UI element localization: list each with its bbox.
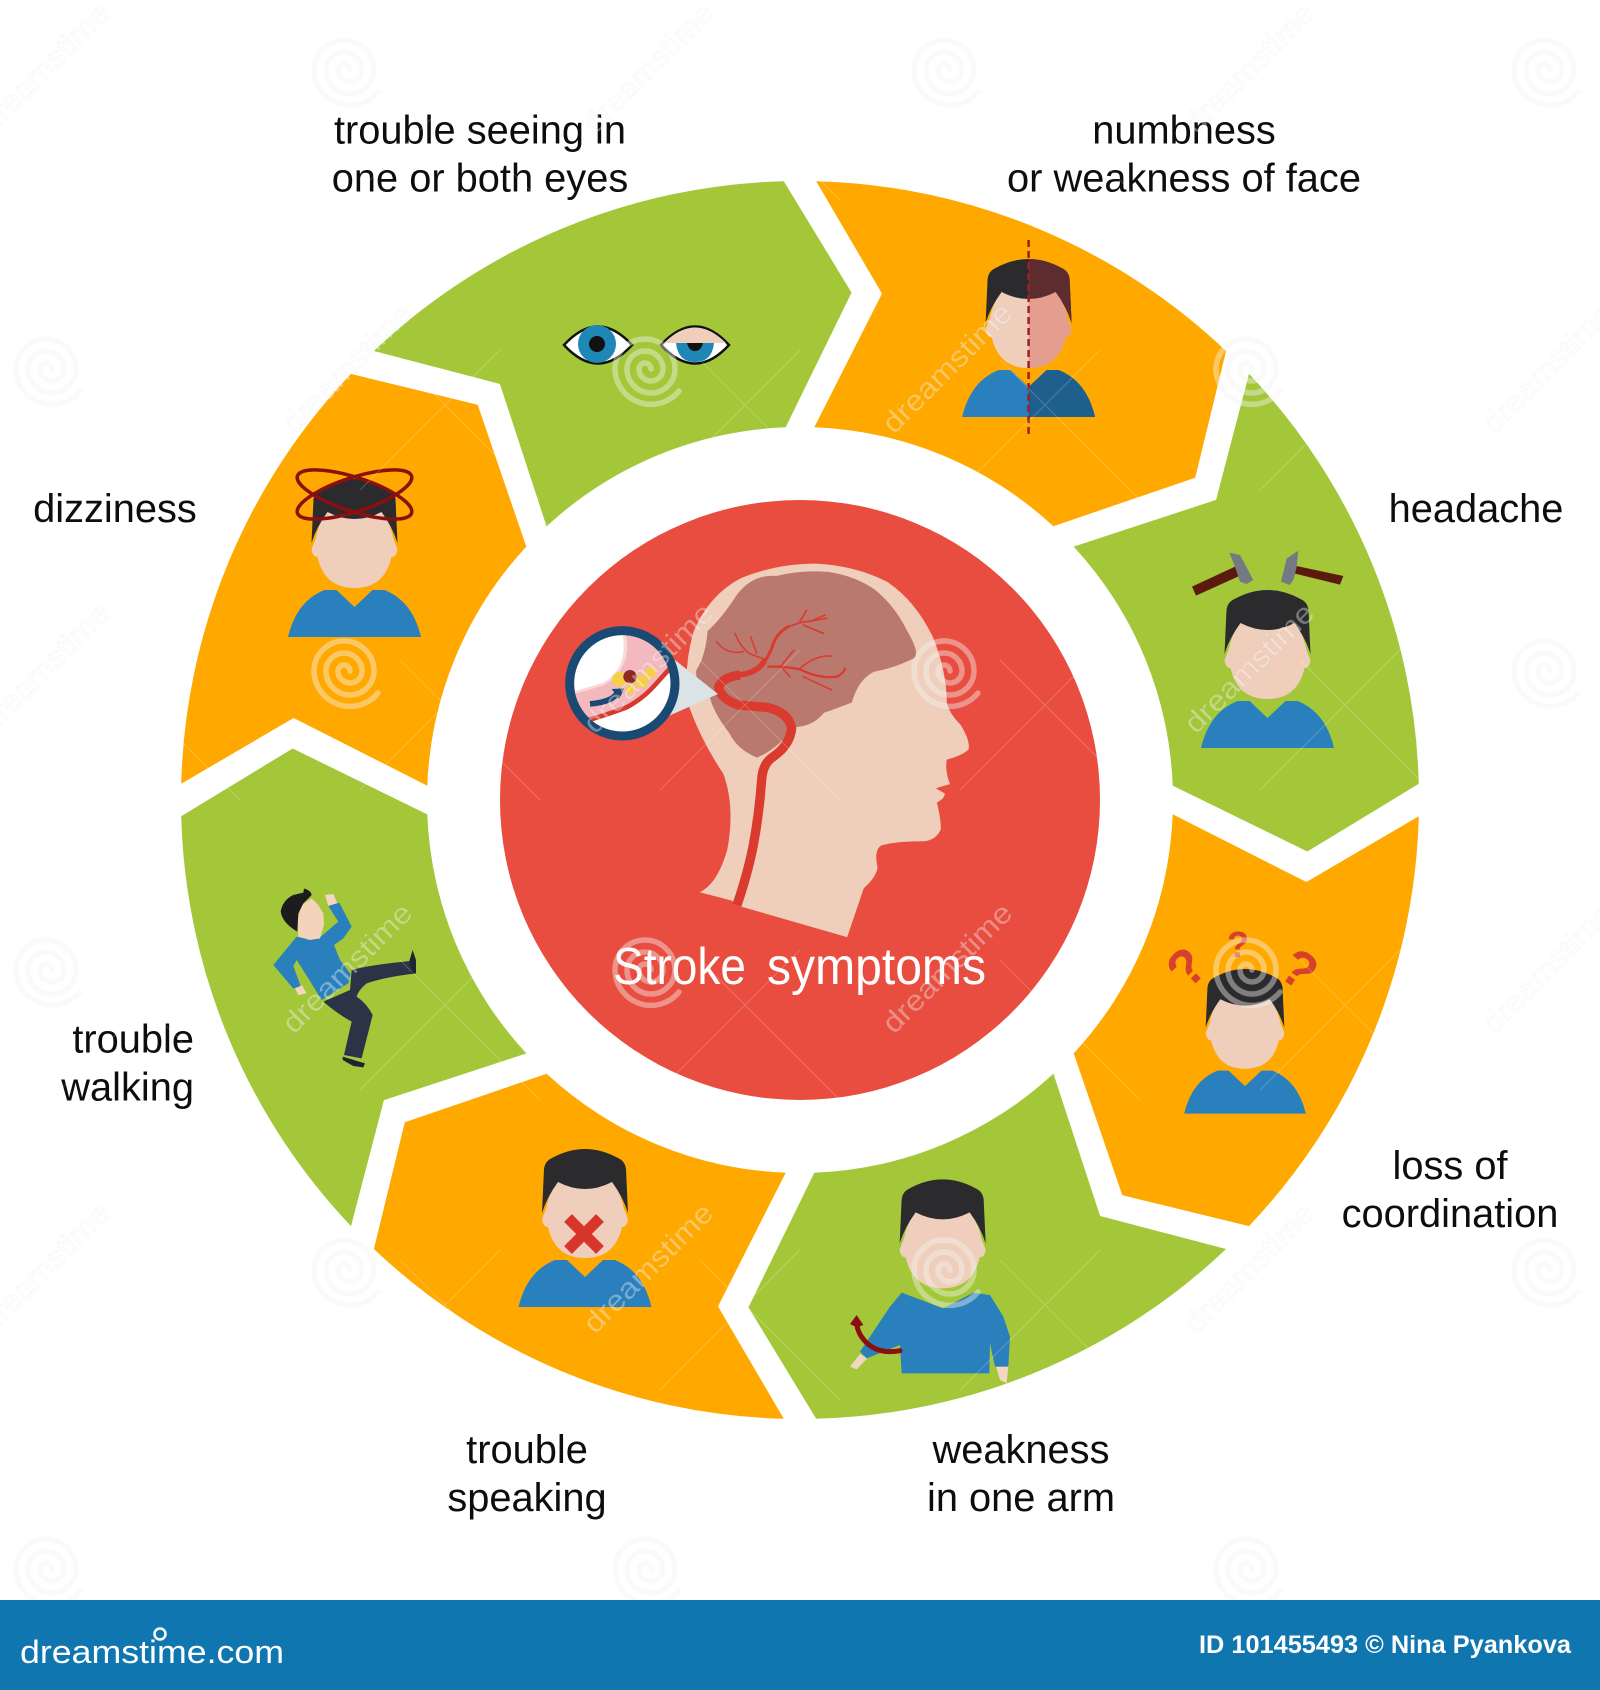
watermark text: dreamstime: [1178, 0, 1321, 140]
segment: loss of coordination: [1074, 814, 1419, 1226]
label: headache: headache: [1389, 487, 1563, 531]
icon: person unable to speak: [518, 1149, 652, 1307]
icon: headache with hammers: [1192, 551, 1343, 748]
segment: dizziness: [181, 374, 526, 786]
icon: stumbling man: [273, 889, 416, 1067]
label: numbness: or weakness of face: [1007, 156, 1361, 200]
footer logo spiral: [154, 1628, 166, 1640]
icon: confused person with question marks: ?: [1155, 936, 1219, 1000]
icon: confused person with question marks: ?: [1227, 924, 1249, 965]
label: numbness: numbness: [1092, 108, 1276, 152]
footer credit: ID 101455493 © Nina Pyankova: [1199, 1631, 1572, 1659]
icon: confused person with question marks: [1155, 924, 1328, 1114]
label: trouble speaking: trouble: [466, 1428, 588, 1472]
icon: face half numb: [962, 240, 1095, 434]
label: loss of coordination: coordination: [1342, 1192, 1558, 1236]
footer logo text: dreamstime.com: [20, 1634, 284, 1670]
segment: numbness or weakness of face: [814, 181, 1226, 526]
segment: trouble seeing: [373, 61, 908, 596]
watermark text: dreamstime: [876, 897, 1019, 1040]
label: weakness in one arm: weakness: [933, 1428, 1109, 1472]
segment: trouble walking: [61, 692, 596, 1227]
segment: weakness in one arm: [692, 1004, 1227, 1539]
heading: Stroke symptoms: [613, 938, 986, 996]
label: dizziness: dizziness: [33, 487, 197, 531]
icon: head with brain and artery: [687, 564, 969, 937]
watermark text: dreamstime: [577, 597, 720, 740]
watermark text: dreamstime: [276, 297, 419, 440]
label: trouble speaking: speaking: [447, 1476, 607, 1520]
watermark text: dreamstime: [577, 1197, 720, 1340]
watermark text: dreamstime: [577, 0, 720, 140]
watermark text: dreamstime: [876, 297, 1019, 440]
heading: Stroke symptoms: Stroke: [613, 938, 746, 996]
watermark text: dreamstime: [1178, 1197, 1321, 1340]
label: trouble walking: walking: [60, 1066, 194, 1110]
label: trouble walking: trouble: [72, 1018, 194, 1062]
watermark text: [0, 0, 1600, 1340]
footer bar: [0, 1600, 1600, 1690]
segment: headache: [1004, 373, 1539, 908]
label: trouble seeing: trouble seeing in: [334, 108, 626, 152]
heading: Stroke symptoms: symptoms: [767, 938, 986, 996]
label: weakness in one arm: in one arm: [927, 1476, 1115, 1520]
icon: person with weak arm: [850, 1179, 1010, 1383]
icon: magnifier on blocked artery: [570, 627, 718, 736]
central red circle: [500, 500, 1100, 1100]
label: trouble seeing: one or both eyes: [332, 156, 628, 200]
icon: dizzy person: [288, 460, 421, 637]
icon: normal and drooping eyes: [564, 325, 729, 364]
icon: confused person with question marks: ?: [1269, 937, 1328, 1003]
watermark text: dreamstime: [1178, 597, 1321, 740]
label: loss of coordination: loss of: [1392, 1144, 1508, 1188]
watermark text: dreamstime: [276, 897, 419, 1040]
segment: trouble speaking: [374, 1074, 786, 1419]
